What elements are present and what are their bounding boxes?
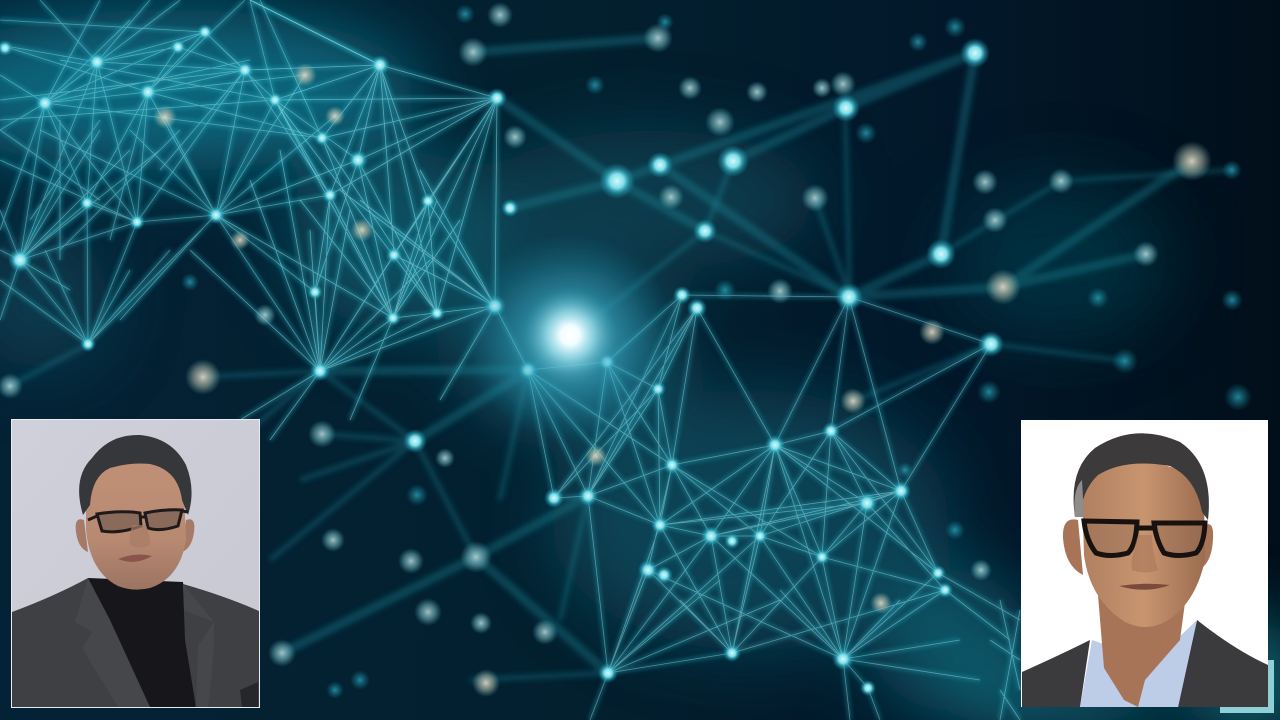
portrait: man in dark blazer, left bbox=[11, 419, 260, 708]
right portrait: hair bbox=[1074, 433, 1209, 520]
left portrait: mouth bbox=[118, 555, 152, 562]
portrait: man with glasses on white, right bbox=[1021, 420, 1268, 707]
left portrait: hair bbox=[79, 435, 192, 515]
right portrait: neck bbox=[1098, 595, 1186, 707]
central light burst bbox=[465, 232, 675, 442]
left portrait: face bbox=[86, 462, 186, 590]
left portrait: pocket square bbox=[240, 682, 258, 707]
left portrait: ears bbox=[76, 519, 194, 552]
left portrait: black shirt bbox=[88, 578, 196, 707]
left portrait: glasses bbox=[88, 510, 188, 532]
right portrait: mouth bbox=[1119, 584, 1170, 590]
right portrait: glasses bbox=[1084, 521, 1205, 556]
right portrait: light blue shirt bbox=[1080, 620, 1197, 707]
left portrait: nose bbox=[129, 525, 150, 548]
network nodes: sharp bright dots bbox=[0, 24, 1004, 696]
right portrait: ears bbox=[1063, 519, 1213, 575]
network lines: central and lower-right cluster bbox=[528, 295, 1020, 720]
right portrait: face bbox=[1082, 463, 1205, 627]
decorative L-shaped light strip by right portrait bbox=[1220, 660, 1274, 713]
left portrait: blazer body bbox=[12, 578, 259, 707]
network lines: upper-left cluster bbox=[0, 0, 528, 440]
left portrait: lapels bbox=[75, 578, 214, 707]
right portrait: nose bbox=[1132, 535, 1158, 572]
right portrait: blazer bbox=[1022, 620, 1268, 707]
